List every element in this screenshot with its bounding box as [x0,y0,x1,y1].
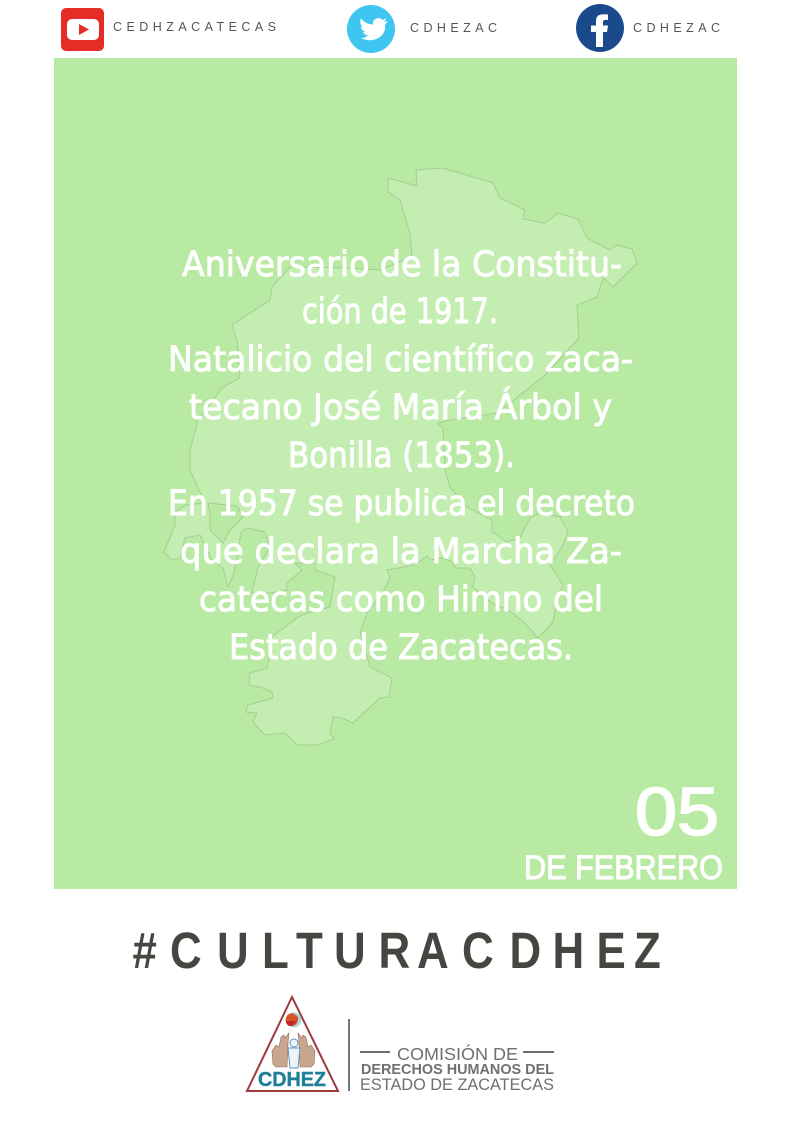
main text: commemorations: En 1957 se publica el decreto [168,484,635,524]
panel: green background [54,58,737,889]
logo divider [348,1019,350,1091]
main text: commemorations: catecas como Himno del [199,580,603,620]
social: youtube: CEDHZACATECAS [113,20,276,34]
logo text: institution name: DERECHOS HUMANOS DEL [361,1061,554,1078]
social: facebook [576,4,720,52]
main text: commemorations: que declara la Marcha Za- [180,532,622,572]
main text: commemorations: Estado de Zacatecas. [229,628,573,668]
icon: sun [286,1012,302,1028]
main text: commemorations: Natalicio del científico zaca- [168,340,633,380]
social: twitter [347,5,497,53]
social: youtube [61,8,276,51]
map: state of Zacatecas silhouette [164,168,637,745]
logo text: institution name [360,1043,554,1094]
main text: commemorations: tecano José María Árbol y [189,386,612,428]
date: 05 de febrero: DE FEBRERO [524,849,723,887]
main text: commemorations: Aniversario de la Constitu- [182,245,622,285]
date: 05 de febrero [524,774,723,887]
date: 05 de febrero: 05 [635,774,719,850]
hashtag: #CULTURACDHEZ [133,923,661,980]
icon: hands protecting person [272,1033,315,1068]
main text: commemorations: Bonilla (1853). [288,436,515,476]
logo text: institution name: COMISIÓN DE [397,1043,518,1064]
logo wordmark: CDHEZ: CDHEZ [258,1069,326,1091]
main text: commemorations: ción de 1917. [302,292,498,332]
logo text: institution name: ESTADO DE ZACATECAS [360,1076,554,1094]
social: twitter: CDHEZAC [410,21,497,35]
logo: CDHEZ triangle emblem [247,997,338,1091]
main text: commemorations [168,245,635,668]
social: facebook: CDHEZAC [633,21,720,35]
